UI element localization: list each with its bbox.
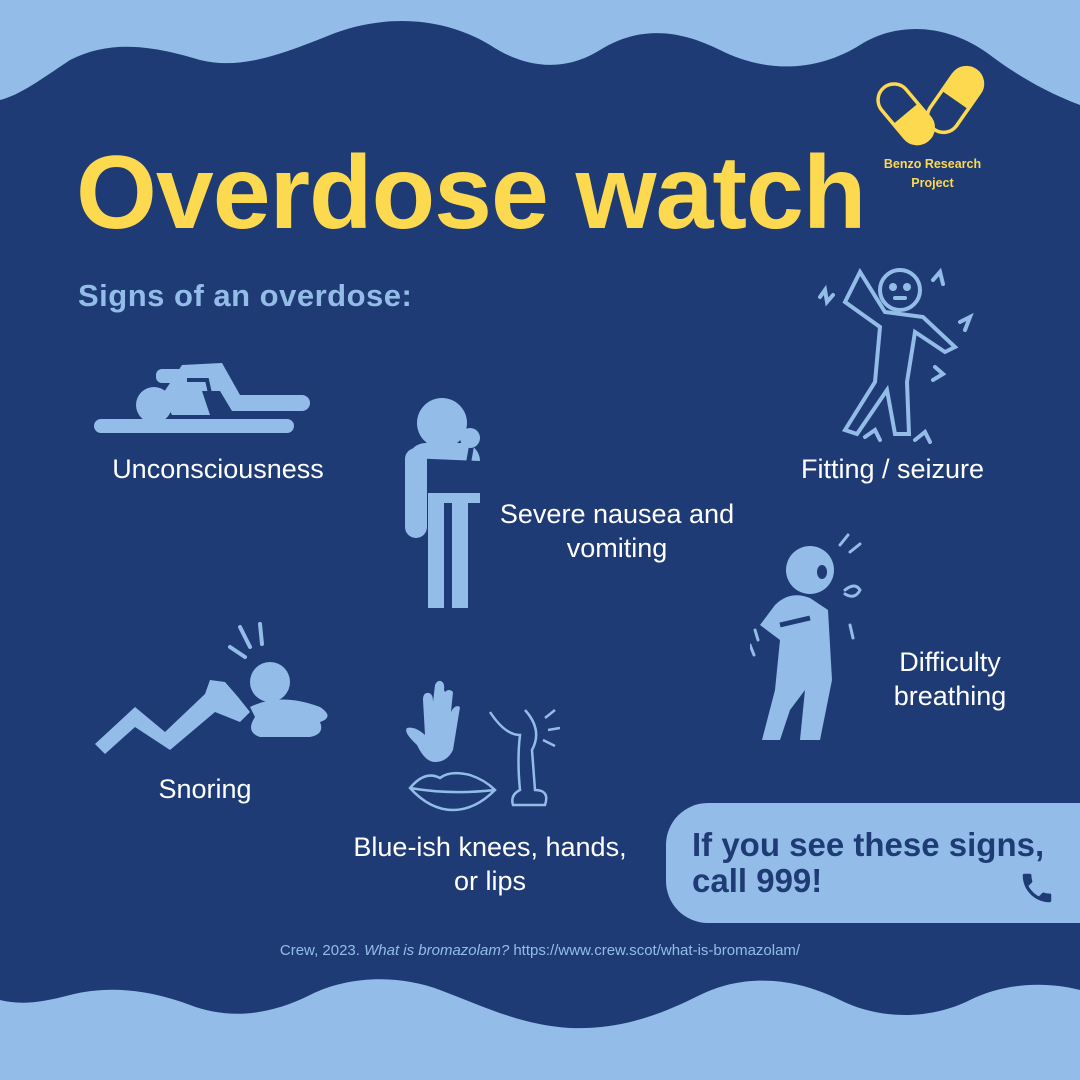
label: Blue-ish knees, hands, or lips: Blue-ish knees, hands, (353, 832, 627, 862)
title: Overdose watch (76, 135, 865, 251)
label: Blue-ish knees, hands, or lips: or lips (454, 866, 526, 896)
label: Severe nausea and vomiting: Severe nausea and (500, 499, 734, 529)
label: Difficulty breathing (894, 647, 1006, 711)
logo: Benzo Research Project: Benzo Research (884, 157, 981, 171)
subtitle: Signs of an overdose: (78, 278, 412, 313)
icon: phone (1022, 874, 1052, 902)
logo: Benzo Research Project (876, 66, 984, 190)
label: Blue-ish knees, hands, or lips (353, 832, 627, 896)
icon: unconscious person (94, 363, 310, 433)
callout: call 999: call 999! (692, 862, 822, 899)
citation: Crew, 2023. What is bromazolam? https://www.crew.scot/what-is-bromazolam/ (280, 942, 800, 959)
callout: call 999 (666, 803, 1080, 923)
label: Snoring: Snoring (158, 774, 252, 804)
icon: difficulty breathing (750, 533, 862, 740)
label: Severe nausea and vomiting: vomiting (567, 533, 667, 563)
label: Fitting / seizure: Fitting / seizure (801, 454, 984, 484)
icon: hand, lips, knee (406, 680, 560, 812)
label: Severe nausea and vomiting (500, 499, 734, 563)
label: Difficulty breathing: breathing (894, 681, 1006, 711)
callout: call 999: If you see these signs, (692, 826, 1044, 863)
label: Difficulty breathing: Difficulty (899, 647, 1001, 677)
icon: seizure (818, 268, 974, 444)
icon: snoring (95, 622, 328, 754)
logo: Benzo Research Project: Project (911, 176, 954, 190)
icon: nauseous person (405, 398, 480, 608)
label: Unconsciousness: Unconsciousness (112, 454, 324, 484)
